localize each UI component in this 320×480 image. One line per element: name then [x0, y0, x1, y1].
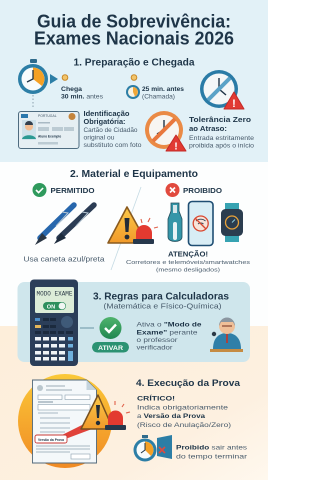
panel: regras para calculadoras: [18, 280, 250, 366]
background: blue header section: [0, 0, 268, 162]
icon: orange clock with prohibition: !: [174, 140, 178, 152]
icon: corrector: [168, 203, 182, 242]
panel: execução da prova: [18, 374, 248, 468]
icon: ID card: Aluno Exemplo: [38, 134, 61, 138]
text: atenção: [126, 250, 250, 274]
icon: green check: [32, 183, 46, 197]
panel: preparação e chegada: [18, 56, 255, 152]
icon: blue clock with prohibition: [200, 70, 244, 110]
heading: section 3: (Matemática e Físico-Química): [104, 304, 222, 310]
icon: calculator: [30, 280, 78, 366]
icon: calculator: MODO EXAME: [36, 290, 73, 298]
icon: red cross: [166, 183, 180, 197]
heading: section 2: 2. Material e Equipamento: [70, 168, 198, 180]
title: [34, 12, 234, 48]
timeline dot: 25 min: [131, 75, 137, 80]
text: crítico: (Risco de Anulação/Zero): [137, 422, 231, 429]
text: crítico: [137, 394, 231, 429]
icon: smartwatch: [221, 203, 243, 242]
text: modo de exame: Ativa o "Modo de: [136, 322, 202, 328]
text: chega 30 min: Chega: [61, 86, 82, 93]
button: ativar: ATIVAR: [98, 346, 124, 352]
illustration: exam sheet: Versão da Prova: [38, 438, 65, 442]
text: tolerância zero: Tolerância Zero: [189, 115, 251, 124]
illustration: exam sheet: [32, 380, 100, 463]
icon: blue clock with prohibition: !: [232, 98, 236, 110]
text: crítico: a Versão da Prova: [137, 413, 205, 420]
text: chega 30 min: 30 min. antes: [61, 94, 103, 100]
text: modo de exame: o professor: [136, 337, 178, 344]
label: permitido: PERMITIDO: [50, 188, 95, 195]
icon: ID card: [18, 112, 79, 148]
background: white materials section: [0, 162, 268, 326]
icon: orange clock with prohibition: [145, 111, 186, 152]
text: tolerância zero: Entrada estritamente: [189, 136, 255, 142]
text: atenção: Corretores e telemóveis/smartwatches: [126, 260, 250, 266]
text: modo de exame: Exame" perante: [136, 330, 198, 336]
text: crítico: Indica obrigatoriamente: [137, 404, 228, 412]
text: tolerância zero: [189, 115, 255, 150]
text: 25 min chamada: (Chamada): [142, 94, 175, 100]
icon: warning triangle with beacon: [108, 207, 158, 244]
label: proibido: PROIBIDO: [183, 188, 223, 195]
heading: section 1: 1. Preparação e Chegada: [74, 56, 195, 68]
icon: pens: [35, 205, 94, 245]
title: Exames Nacionais 2026: [34, 28, 234, 48]
icon: stopwatch and exit door: [134, 435, 172, 462]
text: identificação obrigatória: Obrigatória:: [84, 119, 126, 126]
icon: small clock: [126, 85, 140, 99]
text: proibido sair: Proibido sair antes: [176, 444, 248, 452]
text: 25 min chamada: [142, 86, 185, 100]
panel: material e equipamento: [24, 168, 250, 274]
icon: warning triangle and beacon: [81, 395, 130, 430]
text: atenção: ATENÇÃO!: [168, 250, 208, 258]
icon: ID card: PORTUGAL: [38, 114, 57, 118]
icon: calculator: ON: [47, 304, 55, 310]
text: tolerância zero: ao Atraso:: [189, 124, 227, 133]
text: crítico: CRÍTICO!: [137, 394, 175, 402]
text: tolerância zero: proibida após o início: [189, 144, 255, 150]
title: Guia de Sobrevivência:: [37, 12, 231, 32]
text: identificação obrigatória: Cartão de Cidadão: [84, 128, 138, 134]
text: identificação obrigatória: substituto com foto: [84, 143, 142, 149]
text: identificação obrigatória: original ou: [84, 136, 114, 142]
heading: section 4: 4. Execução da Prova: [136, 378, 241, 389]
text: proibido sair: [176, 444, 248, 460]
text: caneta: Usa caneta azul/preta: [24, 254, 106, 264]
timeline dot: 30 min: [62, 75, 68, 80]
icon: phone no wifi: [188, 202, 213, 246]
text: identificação obrigatória: [84, 111, 142, 149]
illustration: orange circle: [18, 374, 112, 468]
icon: stopwatch: [18, 59, 58, 109]
heading: section 3: 3. Regras para Calculadoras: [93, 292, 230, 302]
text: modo de exame: [136, 322, 202, 352]
button: ativar: [92, 342, 129, 352]
background: peach lower section: [0, 326, 268, 480]
heading: section 3: [93, 292, 230, 310]
text: proibido sair: do tempo terminar: [176, 454, 248, 460]
text: atenção: (mesmo desligados): [156, 268, 220, 274]
text: 25 min chamada: 25 min. antes: [142, 86, 185, 93]
text: identificação obrigatória: Identificação: [84, 111, 130, 118]
icon: check activate: [100, 317, 122, 339]
text: chega 30 min: [61, 86, 103, 100]
text: modo de exame: verificador: [136, 344, 173, 352]
icon: teacher: [210, 318, 243, 352]
